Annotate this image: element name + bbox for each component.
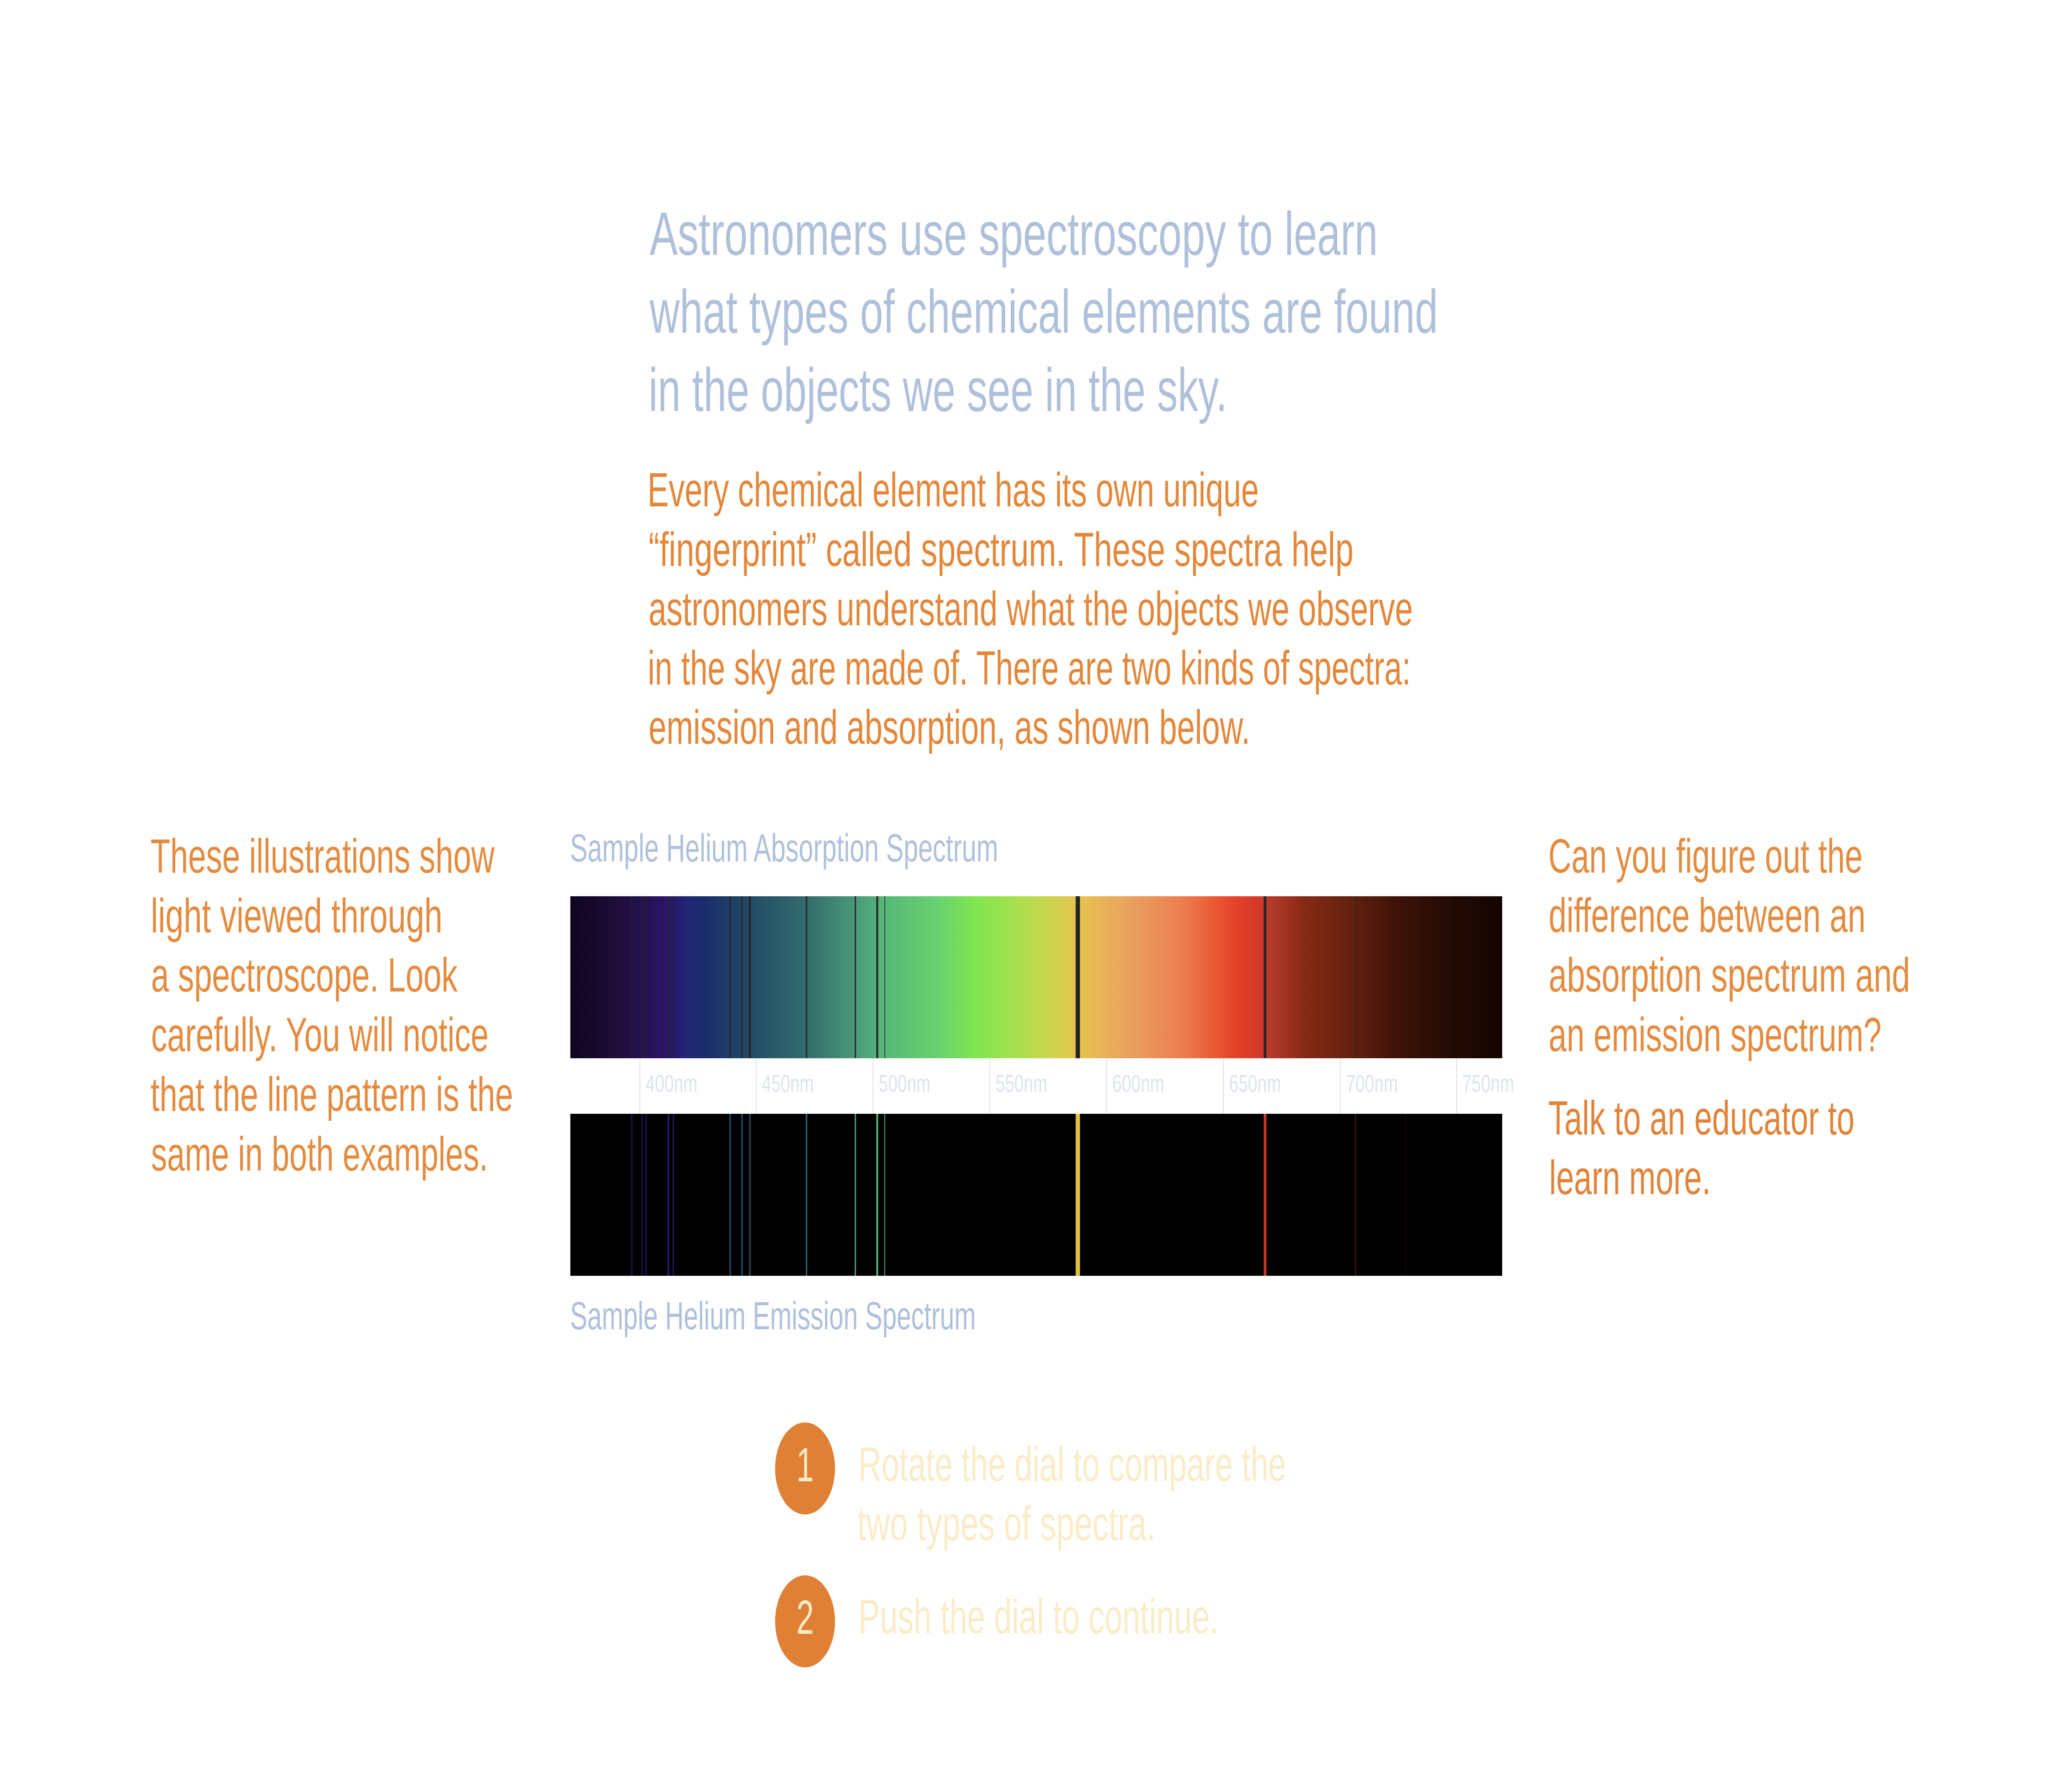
- left explanation text: carefully. You will notice: [151, 1008, 489, 1062]
- wavelength scale: 650nm: [1229, 1071, 1281, 1097]
- right question text: absorption spectrum and: [1549, 948, 1910, 1002]
- right question text: Can you figure out the: [1548, 829, 1863, 883]
- emission spectrum label: Sample Helium Emission Spectrum: [570, 1293, 976, 1338]
- intro paragraph: [647, 463, 1413, 754]
- title: in the objects we see in the sky.: [649, 356, 1227, 424]
- left explanation text: that the line pattern is the: [150, 1067, 513, 1121]
- title: Astronomers use spectroscopy to learn: [650, 200, 1378, 268]
- wavelength scale: 450nm: [762, 1071, 814, 1097]
- intro paragraph: astronomers understand what the objects we observe: [649, 582, 1413, 636]
- step 2 text: Push the dial to continue.: [859, 1590, 1219, 1644]
- wavelength scale: 750nm: [1462, 1071, 1514, 1097]
- right educator prompt: learn more.: [1549, 1151, 1711, 1205]
- left explanation text: same in both examples.: [151, 1127, 488, 1181]
- wavelength scale: 700nm: [1346, 1071, 1398, 1097]
- right question text: an emission spectrum?: [1549, 1008, 1881, 1062]
- step 1 text: Rotate the dial to compare the: [859, 1437, 1286, 1491]
- absorption spectrum label: Sample Helium Absorption Spectrum: [570, 825, 998, 870]
- intro paragraph: Every chemical element has its own unique: [647, 463, 1259, 517]
- wavelength scale: 600nm: [1112, 1071, 1164, 1097]
- step 2 badge: 2: [796, 1590, 814, 1644]
- right educator prompt: [1548, 1091, 1854, 1205]
- right question text: [1548, 829, 1910, 1062]
- step 1 badge: 1: [796, 1438, 814, 1492]
- title: what types of chemical elements are found: [649, 278, 1438, 346]
- emission spectrum bar: [570, 1114, 1502, 1276]
- title: [649, 200, 1438, 424]
- wavelength scale: 500nm: [879, 1071, 930, 1097]
- left explanation text: light viewed through: [151, 889, 443, 943]
- step 2 badge: [775, 1575, 835, 1667]
- wavelength scale: 400nm: [646, 1071, 697, 1097]
- step 1 badge: [775, 1422, 835, 1514]
- step 1 text: two types of spectra.: [857, 1497, 1155, 1551]
- absorption spectrum bar: [570, 896, 1502, 1058]
- intro paragraph: emission and absorption, as shown below.: [649, 700, 1250, 754]
- left explanation text: a spectroscope. Look: [151, 948, 458, 1002]
- left explanation text: These illustrations show: [150, 829, 495, 883]
- right question text: difference between an: [1549, 888, 1866, 942]
- wavelength scale: 550nm: [995, 1071, 1047, 1097]
- step 1 text: [857, 1437, 1286, 1551]
- right educator prompt: Talk to an educator to: [1548, 1091, 1854, 1145]
- intro paragraph: in the sky are made of. There are two kinds of spectra:: [648, 641, 1411, 695]
- left explanation text: [150, 829, 513, 1181]
- intro paragraph: “fingerprint” called spectrum. These spectra help: [649, 522, 1353, 576]
- wavelength scale: [640, 1058, 1514, 1114]
